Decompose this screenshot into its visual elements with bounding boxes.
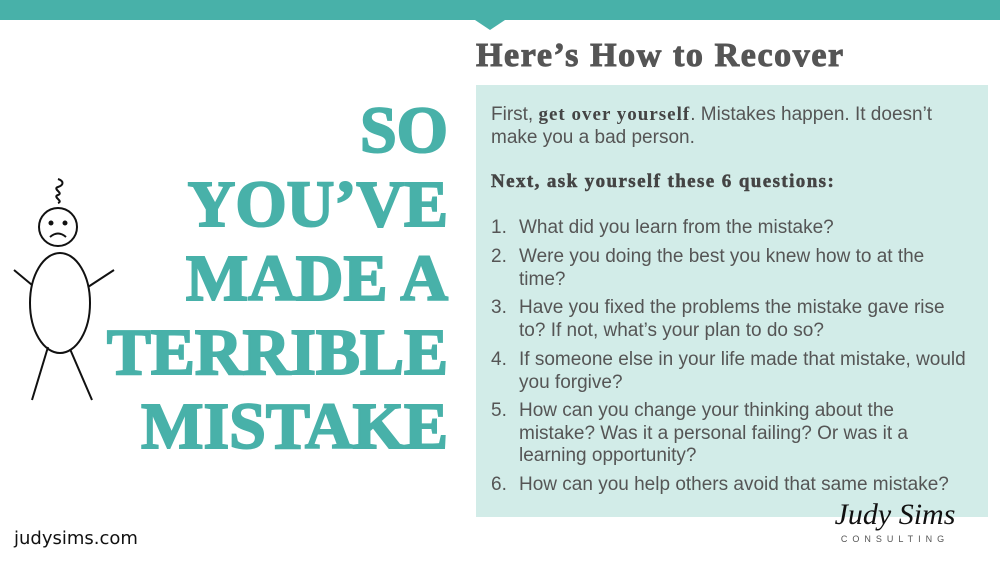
question list: 6. — [491, 474, 507, 495]
logo: Judy Sims — [835, 498, 955, 531]
question list: 5. — [491, 400, 507, 421]
logo: CONSULTING — [841, 534, 949, 544]
question list: If someone else in your life made that mistake, would you forgive? — [519, 349, 966, 392]
title: SO — [360, 94, 448, 167]
title: YOU’VE — [188, 168, 448, 241]
question list: 4. — [491, 349, 507, 370]
title: TERRIBLE — [107, 316, 448, 389]
top bar — [0, 0, 1000, 30]
heading: Here’s How to Recover — [476, 37, 845, 74]
question list: 3. — [491, 297, 507, 318]
intro text: First, get over yourself. Mistakes happen. It doesn’t make you a bad person. — [491, 104, 932, 148]
question list: 2. — [491, 246, 507, 267]
title: MADE A — [186, 242, 448, 315]
question list: How can you help others avoid that same mistake? — [519, 474, 949, 495]
icon: sad stick figure — [13, 178, 114, 400]
question list: Have you fixed the problems the mistake gave rise to? If not, what’s your plan to do so? — [519, 297, 945, 340]
panel: recover — [476, 85, 988, 517]
subheading: Next, ask yourself these 6 questions: — [491, 171, 835, 192]
question list — [491, 217, 966, 495]
website: judysims.com — [14, 528, 138, 549]
title: MISTAKE — [141, 390, 448, 463]
question list: What did you learn from the mistake? — [519, 217, 834, 238]
question list: How can you change your thinking about the mistake? Was it a personal failing? Or was it a learning opportunity? — [519, 400, 908, 466]
question list: Were you doing the best you knew how to at the time? — [519, 246, 924, 290]
question list: 1. — [491, 217, 507, 238]
title — [106, 94, 449, 463]
